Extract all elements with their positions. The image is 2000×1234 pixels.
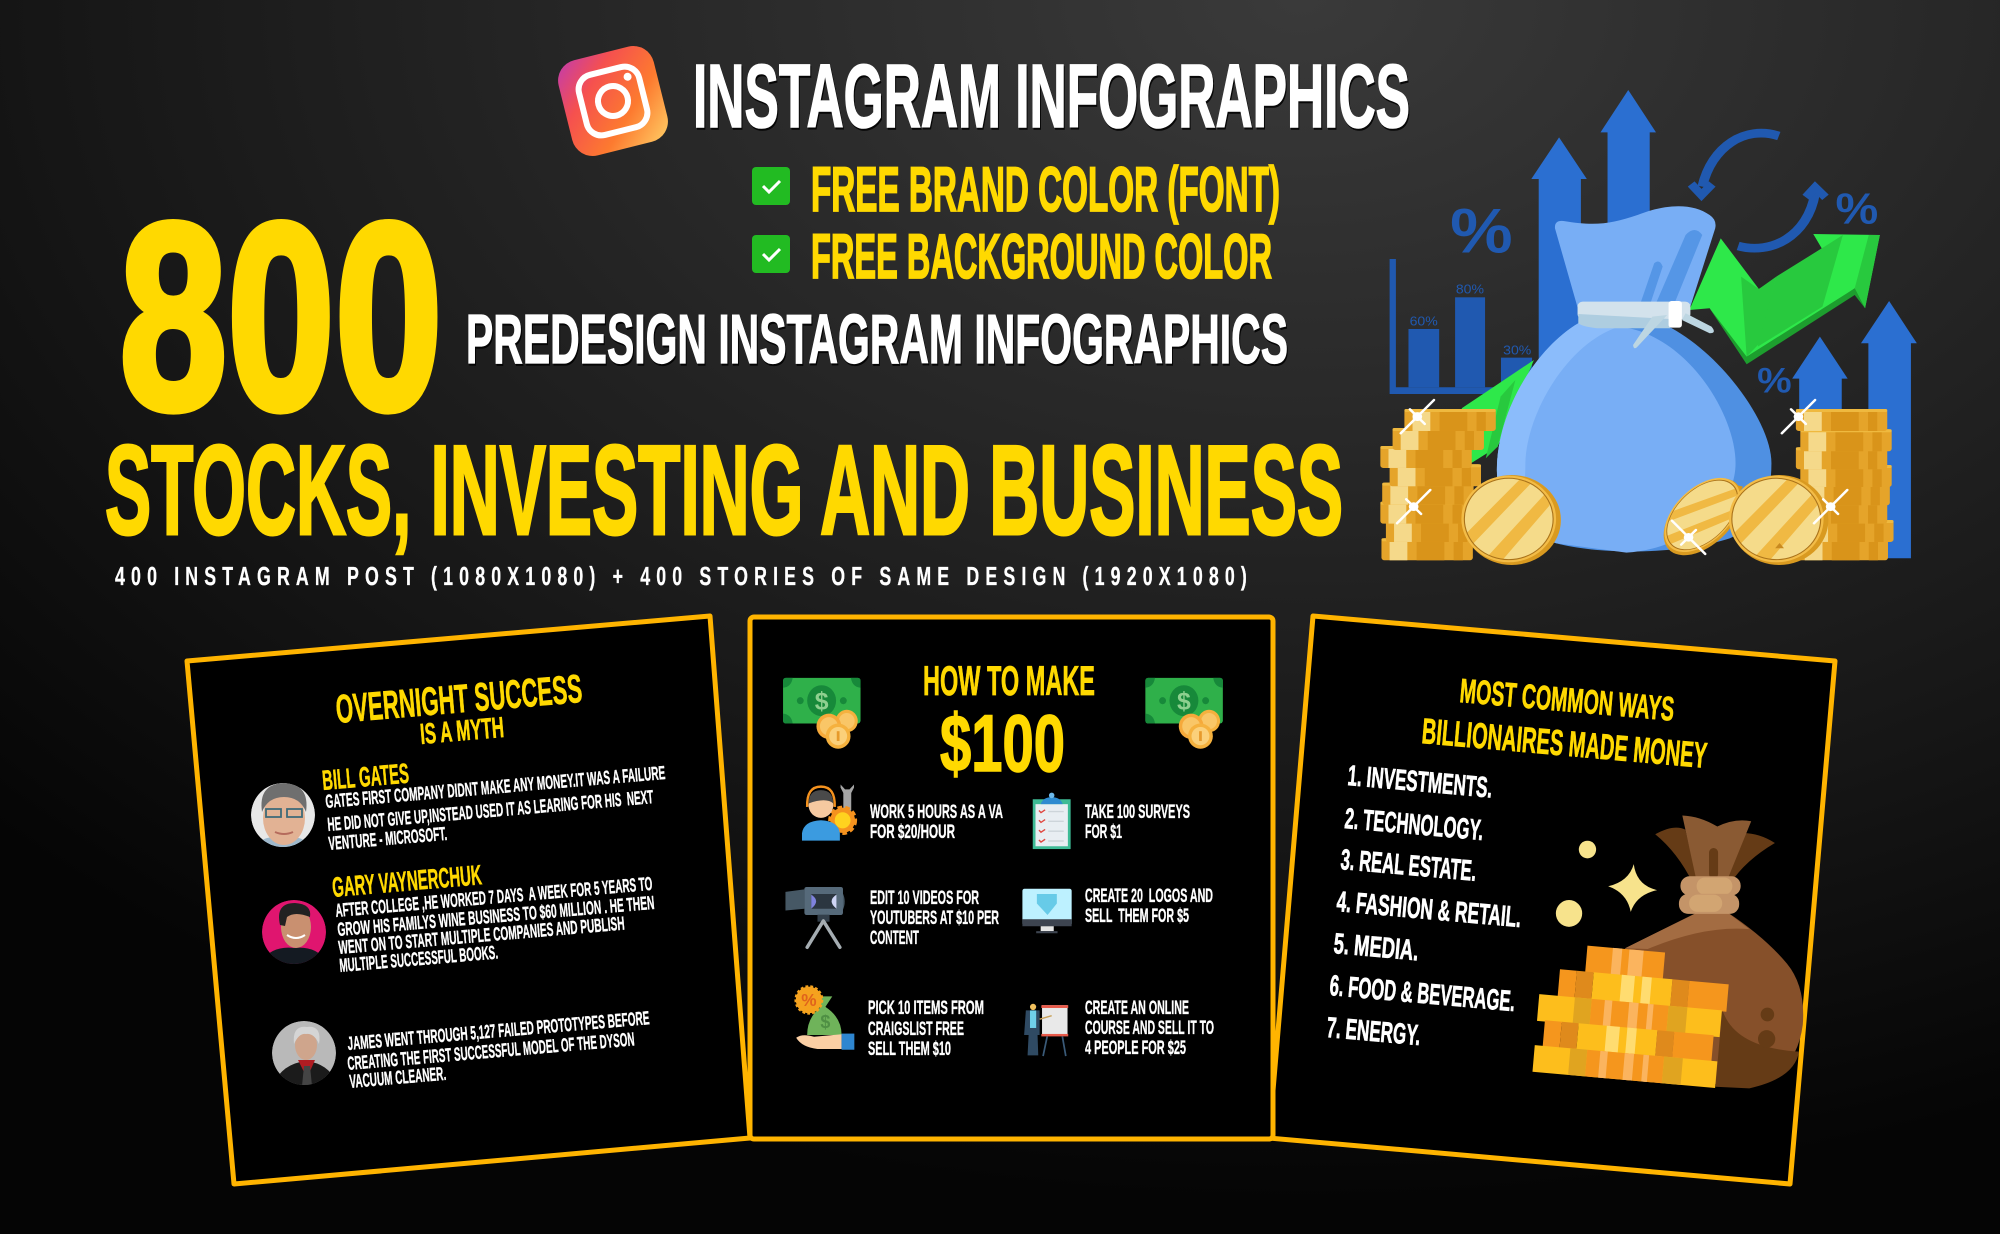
item: surveys: [1085, 801, 1190, 843]
numbered list: 4. FASHION & RETAIL.: [1335, 886, 1522, 934]
feature: free brand color: FREE BRAND COLOR (FONT): [811, 155, 1280, 225]
item: work as a VA: WORK 5 HOURS AS A VA: [870, 801, 1003, 823]
panel heading: IS A MYTH: [419, 712, 505, 751]
icon: money bag in hand: $: [820, 1012, 830, 1032]
item: surveys: TAKE 100 SURVEYS: [1085, 801, 1190, 823]
panel frame: [1269, 616, 1835, 1184]
percent signs: %: [1836, 185, 1878, 233]
icons in grid: [783, 678, 1223, 1056]
bio: gary vaynerchuk: GARY VAYNERCHUK: [331, 859, 483, 903]
bio: gary vaynerchuk: [331, 859, 655, 977]
big number 800: 800: [120, 169, 442, 465]
sparkle and dots: [1556, 841, 1657, 927]
item: surveys: FOR $1: [1085, 821, 1122, 843]
bar chart: 30%: [1503, 343, 1531, 357]
illustration: brown money bag and coins: [1532, 815, 1803, 1088]
item: craigslist: SELL THEM $10: [868, 1038, 951, 1060]
bio: gary vaynerchuk: WENT ON TO START MULTIPLE COMPANIES AND PUBLISH: [338, 914, 625, 959]
brown sack: [1625, 815, 1803, 1088]
bio: james dyson: JAMES WENT THROUGH 5,127 FAILED PROTOTYPES BEFORE: [347, 1008, 650, 1055]
panel: overnight success: [187, 616, 750, 1184]
bio: gary vaynerchuk: GROW HIS FAMILYS WINE BUSINESS TO $60 MILLION . HE THEN: [337, 893, 655, 941]
item: create logos: SELL THEM FOR $5: [1085, 905, 1189, 927]
bio: james dyson: VACUUM CLEANER.: [349, 1064, 447, 1093]
portrait: james dyson: [272, 1021, 338, 1088]
subtitle: predesign: PREDESIGN INSTAGRAM INFOGRAPHICS: [466, 300, 1288, 378]
numbered list: 3. REAL ESTATE.: [1339, 844, 1478, 888]
portrait: gary vaynerchuk: [262, 900, 326, 964]
panel heading: $100: [940, 699, 1065, 789]
icon: money bag in hand: %: [801, 990, 817, 1010]
icon: monitor: [1022, 889, 1072, 933]
item: edit videos: YOUTUBERS AT $10 PER: [870, 907, 999, 929]
big coins: [1461, 465, 1828, 569]
numbered list: [1325, 760, 1522, 1052]
bio: james dyson: [347, 1008, 650, 1093]
panel: how to make $100: [750, 617, 1273, 1139]
panel heading: BILLIONAIRES MADE MONEY: [1420, 710, 1709, 776]
percent signs: %: [1450, 196, 1513, 267]
circular arrows: [1691, 133, 1825, 248]
item: edit videos: EDIT 10 VIDEOS FOR: [870, 887, 979, 909]
item: online course: [1085, 997, 1214, 1059]
gold coin rows: [1532, 946, 1729, 1088]
percent signs: %: [1757, 361, 1792, 400]
numbered list: 5. MEDIA.: [1332, 928, 1420, 967]
bar chart: 60%: [1410, 314, 1438, 328]
bio: gary vaynerchuk: MULTIPLE SUCCESSFUL BOOKS.: [339, 942, 499, 977]
feature: free background color: FREE BACKGROUND COLOR: [811, 222, 1272, 292]
bio: bill gates: BILL GATES: [321, 758, 410, 796]
icon: presenter: [1024, 1004, 1068, 1056]
bio: james dyson: CREATING THE FIRST SUCCESSFUL MODEL OF THE DYSON: [347, 1029, 635, 1075]
icon: money left: [783, 678, 861, 749]
item: online course: CREATE AN ONLINE: [1085, 997, 1189, 1019]
portrait: bill gates: [251, 783, 315, 850]
panel heading: HOW TO MAKE: [923, 657, 1095, 704]
item: create logos: [1085, 885, 1213, 927]
bio: gary vaynerchuk: AFTER COLLEGE ,HE WORKED 7 DAYS A WEEK FOR 5 YEARS TO: [335, 874, 653, 922]
bag tie: [1578, 301, 1714, 348]
panel heading: OVERNIGHT SUCCESS: [334, 667, 584, 732]
icon: check two: [752, 235, 790, 273]
numbered list: 6. FOOD & BEVERAGE.: [1328, 970, 1516, 1018]
title: INSTAGRAM INFOGRAPHICS: [693, 47, 1410, 147]
icon: money bag in hand: [796, 987, 854, 1050]
numbered list: 2. TECHNOLOGY.: [1343, 803, 1485, 847]
item: online course: 4 PEOPLE FOR $25: [1085, 1037, 1186, 1059]
panel heading: [923, 657, 1095, 789]
green growth arrow: [1462, 234, 1880, 463]
panel heading: [334, 667, 584, 751]
bar chart: 80%: [1456, 282, 1484, 296]
right coin stack: [1796, 409, 1894, 560]
panel heading: MOST COMMON WAYS: [1458, 672, 1676, 729]
item: craigslist: CRAIGSLIST FREE: [868, 1018, 964, 1040]
item: create logos: CREATE 20 LOGOS AND: [1085, 885, 1213, 907]
caption line: 400 INSTAGRAM POST (1080X1080) + 400 STORIES OF SAME DESIGN (1920X1080): [115, 561, 1253, 591]
bio: bill gates: VENTURE - MICROSOFT.: [328, 824, 448, 855]
icon: money right: [1145, 678, 1223, 749]
item: work as a VA: [870, 801, 1003, 843]
percent signs: [1450, 185, 1878, 400]
icon: clipboard: [1033, 793, 1071, 849]
bio: bill gates: [321, 758, 666, 855]
bio: bill gates: GATES FIRST COMPANY DIDNT MAKE ANY MONEY.IT WAS A FAILURE: [325, 763, 666, 813]
icon: video camera: [785, 887, 845, 947]
item: edit videos: [870, 887, 999, 949]
icon: support worker: [802, 785, 855, 841]
numbered list: 1. INVESTMENTS.: [1346, 760, 1494, 805]
bag body: [1497, 206, 1771, 553]
bio: bill gates: HE DID NOT GIVE UP,INSTEAD USED IT AS LEARING FOR HIS NEXT: [327, 787, 654, 836]
blue up arrows: [1531, 90, 1917, 558]
numbered list: 7. ENERGY.: [1325, 1012, 1422, 1052]
sparkles: [1397, 400, 1847, 554]
panel heading: [1420, 672, 1709, 776]
item: work as a VA: FOR $20/HOUR: [870, 821, 955, 843]
item: craigslist: PICK 10 ITEMS FROM: [868, 997, 984, 1019]
panel frame: [750, 617, 1273, 1139]
item: edit videos: CONTENT: [870, 927, 919, 949]
left coin stack: [1380, 409, 1496, 560]
panel frame: [187, 616, 750, 1184]
icon: instagram logo: [554, 42, 672, 160]
item: craigslist: [868, 997, 984, 1060]
item: online course: COURSE AND SELL IT TO: [1085, 1017, 1214, 1039]
panel: billionaires: [1269, 616, 1835, 1184]
illustration: money bag with arrows and coins: [1380, 90, 1917, 569]
bar chart: [1390, 259, 1538, 394]
icon: check one: [752, 167, 790, 205]
